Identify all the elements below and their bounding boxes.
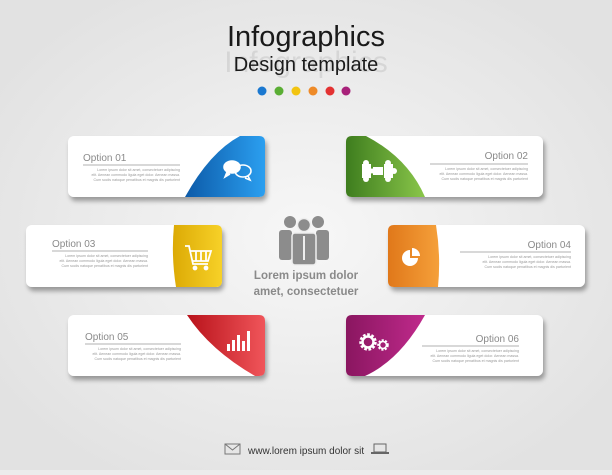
icon: gears <box>361 335 388 350</box>
icon: puzzle <box>362 160 397 182</box>
panel: option 01: Cum sociis natoque penatibus et magnis dis parturient <box>94 178 180 182</box>
panel: option 03: elit. Aenean commodo ligula eget dolor. Aenean massa. <box>59 259 148 263</box>
panel: option 05 <box>68 315 265 376</box>
title: Infographics <box>227 21 385 53</box>
icon: bar chart <box>227 331 250 351</box>
panel: option 03: Option 03 <box>52 239 96 250</box>
panel: option 06: Lorem ipsum dolor sit amet, consectetuer adipiscing <box>436 349 519 353</box>
panel: option 06: elit. Aenean commodo ligula eget dolor. Aenean massa. <box>430 354 519 358</box>
panel: option 04: elit. Aenean commodo ligula eget dolor. Aenean massa. <box>482 260 571 264</box>
icon: speech bubbles <box>224 161 251 180</box>
panel: option 04 <box>388 225 585 287</box>
panel: option 02: Option 02 <box>485 151 528 162</box>
panel: option 06: Option 06 <box>476 334 519 345</box>
panel: option 04: Cum sociis natoque penatibus et magnis dis parturient <box>484 265 571 269</box>
panel: option 05: Lorem ipsum dolor sit amet, consectetuer adipiscing <box>98 347 181 351</box>
panel: option 01 <box>68 136 265 197</box>
footer: www.lorem ipsum dolor sit <box>247 446 364 457</box>
panel: option 02: Lorem ipsum dolor sit amet, consectetuer adipiscing <box>445 167 528 171</box>
panel: option 03: Cum sociis natoque penatibus et magnis dis parturient <box>62 264 148 268</box>
panel: option 05: elit. Aenean commodo ligula eget dolor. Aenean massa. <box>92 352 181 356</box>
center text: amet, consectetuer <box>254 286 359 298</box>
panel: option 02: elit. Aenean commodo ligula eget dolor. Aenean massa. <box>439 172 528 176</box>
panel: option 02: Cum sociis natoque penatibus et magnis dis parturient <box>442 177 528 181</box>
title <box>224 21 388 79</box>
center text: Lorem ipsum dolor <box>254 270 359 282</box>
panel: option 02 <box>346 136 543 197</box>
panel: option 06 <box>346 315 543 376</box>
panel: option 06: Cum sociis natoque penatibus et magnis dis parturient <box>432 359 519 363</box>
icon: pie chart <box>402 248 420 266</box>
title: Infographics <box>224 46 388 79</box>
panel: option 05: Cum sociis natoque penatibus et magnis dis parturient <box>94 357 181 361</box>
panel: option 04: Option 04 <box>528 240 571 251</box>
icon: laptop <box>371 444 389 454</box>
panel: option 01: Option 01 <box>83 153 127 164</box>
panel: option 01: Lorem ipsum dolor sit amet, consectetuer adipiscing <box>97 168 180 172</box>
color dots <box>258 86 350 96</box>
icon: team people <box>279 216 329 265</box>
title: Design template <box>234 54 378 76</box>
center text <box>254 270 359 298</box>
panel: option 04: Lorem ipsum dolor sit amet, consectetuer adipiscing <box>488 255 571 259</box>
footer <box>225 444 389 457</box>
panel: option 01: elit. Aenean commodo ligula eget dolor. Aenean massa. <box>91 173 180 177</box>
panel: option 03 <box>26 225 222 287</box>
panel: option 05: Option 05 <box>85 332 129 343</box>
icon: envelope <box>225 444 240 454</box>
panel: option 03: Lorem ipsum dolor sit amet, consectetuer adipiscing <box>65 254 148 258</box>
icon: cart <box>185 246 211 270</box>
